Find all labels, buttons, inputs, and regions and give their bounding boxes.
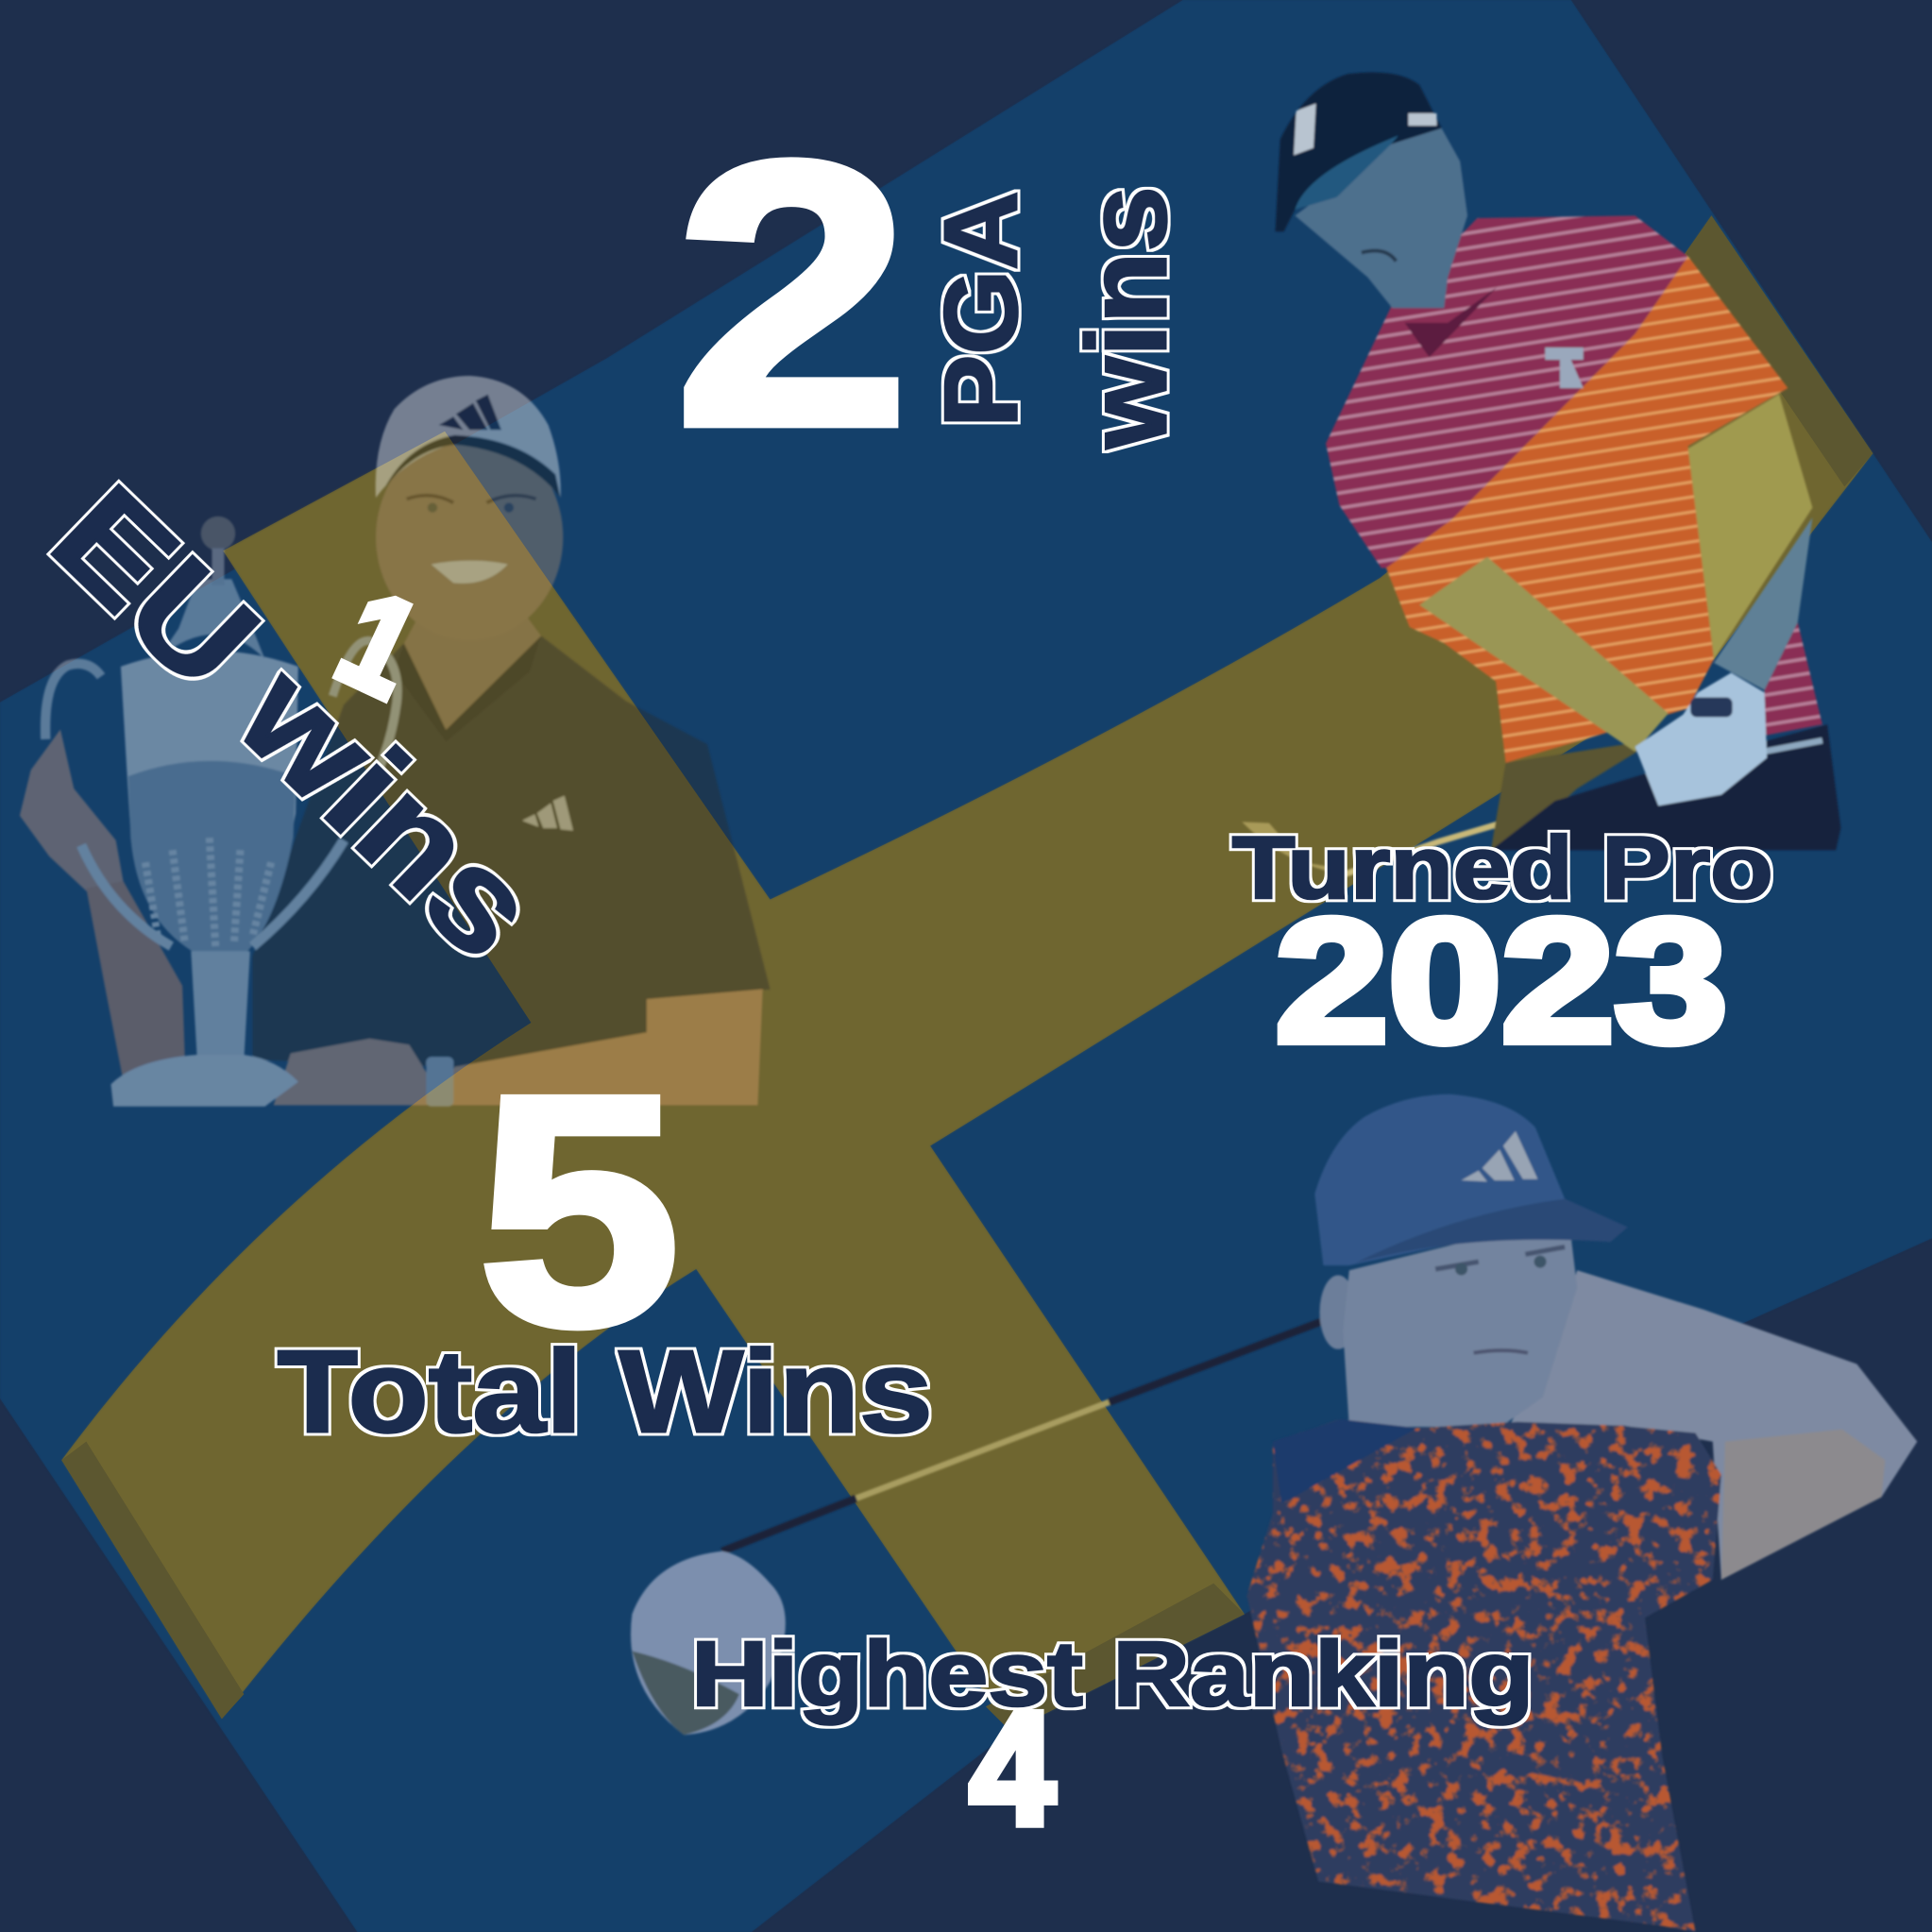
stat: 4: 4 bbox=[970, 1678, 1055, 1857]
shirt lower red bbox=[1765, 622, 1822, 736]
label: Highest Ranking: Highest Ranking bbox=[691, 1621, 1534, 1725]
face bbox=[1343, 1216, 1577, 1427]
label: wins (rotated): wins bbox=[1063, 186, 1190, 449]
shirt logo bbox=[522, 796, 573, 830]
club shaft bbox=[722, 1321, 1323, 1551]
eyes and brows bbox=[407, 496, 536, 502]
club head bbox=[631, 1551, 786, 1735]
player photo: striped polo bbox=[1242, 73, 1840, 874]
stat: 5: 5 bbox=[478, 1028, 680, 1393]
flag: yellow cross bbox=[61, 215, 1873, 1731]
collar bbox=[1273, 1419, 1417, 1503]
face and neck bbox=[1295, 128, 1467, 308]
player photo: holding trophy bbox=[20, 376, 771, 1107]
stat: 2023: 2023 bbox=[1276, 884, 1727, 1079]
stat: 1: 1 bbox=[318, 563, 440, 726]
player photo: patterned shirt swing bbox=[631, 1094, 1917, 1932]
ear bbox=[1319, 1276, 1357, 1349]
stat: 2: 2 bbox=[674, 85, 910, 504]
label: PGA (rotated): PGA bbox=[924, 191, 1039, 428]
chest logo bbox=[1545, 347, 1584, 388]
cap logo bbox=[439, 395, 501, 430]
label: Total Wins: Total Wins bbox=[278, 1327, 933, 1457]
label: Turned Pro: Turned Pro bbox=[1232, 818, 1773, 917]
shirt orange bbox=[1386, 256, 1788, 763]
label: EU wins (rotated): EU wins bbox=[24, 455, 568, 989]
hips bbox=[1491, 739, 1657, 850]
cap bbox=[1314, 1094, 1628, 1265]
cap logo bbox=[1294, 104, 1316, 155]
trousers bbox=[1491, 724, 1840, 850]
trophy bbox=[45, 517, 398, 1107]
glove and hand bbox=[1635, 672, 1767, 805]
collar V bbox=[395, 636, 541, 742]
neck and face bbox=[404, 603, 541, 729]
smile bbox=[432, 561, 508, 584]
cap bbox=[1276, 73, 1442, 231]
arms bbox=[1419, 557, 1669, 752]
shirt red bbox=[1326, 215, 1688, 568]
arm and hands bbox=[424, 990, 763, 1105]
collar bbox=[1392, 218, 1540, 351]
shirt bbox=[252, 636, 771, 1067]
cap bbox=[376, 376, 561, 498]
cap logo bbox=[1462, 1131, 1537, 1181]
raised arm bbox=[1509, 1270, 1917, 1580]
shirt bbox=[1246, 1420, 1722, 1932]
club bbox=[1343, 784, 1635, 874]
flag: shaded fold strips bbox=[61, 215, 1873, 1731]
